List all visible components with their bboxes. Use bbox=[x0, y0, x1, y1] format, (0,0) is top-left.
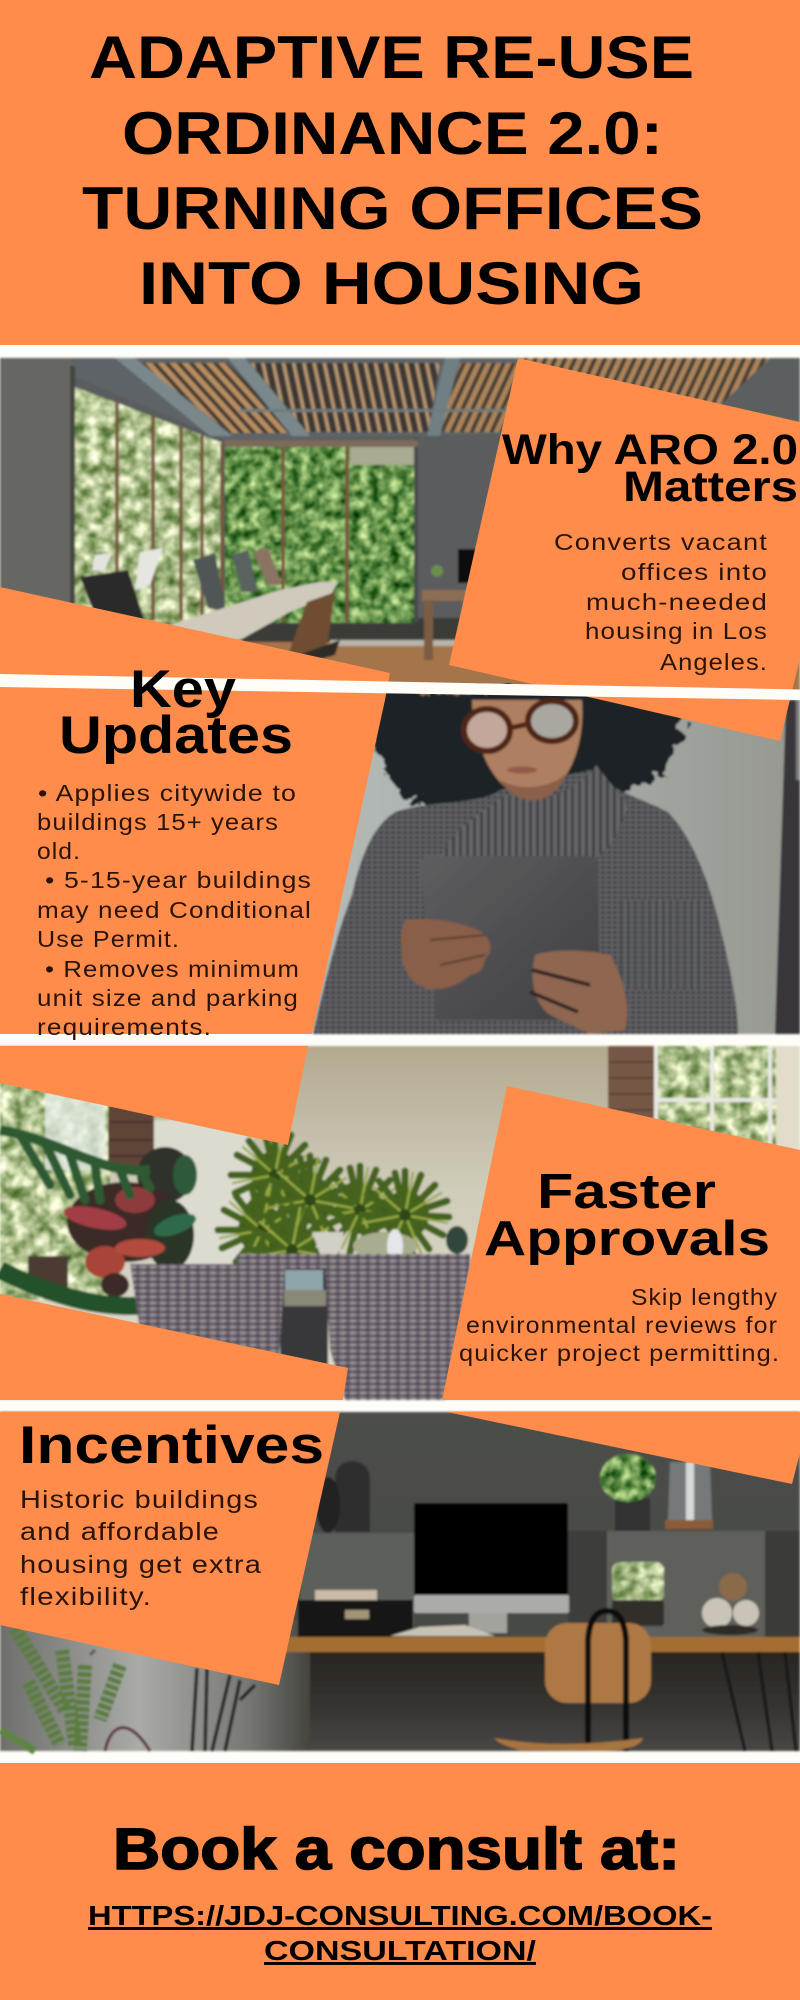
dracaena plants bbox=[218, 1131, 449, 1292]
panel: title banner bbox=[0, 0, 800, 345]
pine branches bbox=[0, 1130, 150, 1170]
decorative balls bbox=[719, 1573, 747, 1601]
heading: Key Updates: Updates bbox=[59, 706, 293, 765]
text: incentives body bbox=[20, 1486, 262, 1611]
panel: footer banner bbox=[0, 1763, 800, 2000]
croton plant bbox=[62, 1147, 199, 1297]
pot bbox=[312, 1232, 344, 1254]
hair bbox=[371, 690, 683, 807]
heading: Why ARO 2.0 Matters: Matters bbox=[623, 463, 798, 511]
heading: Key Updates: Key bbox=[130, 660, 237, 719]
shape: Incentives panel bbox=[0, 1412, 340, 1685]
text: key updates list: may need Conditional bbox=[37, 897, 312, 923]
text: faster approvals body: quicker project permitting. bbox=[459, 1340, 780, 1366]
text: key updates list: • Applies citywide to bbox=[38, 780, 297, 806]
link: consultation URL: CONSULTATION/ bbox=[264, 1935, 536, 1966]
text: key updates list: buildings 15+ years bbox=[37, 809, 279, 835]
text: key updates list: Use Permit. bbox=[37, 926, 180, 952]
text: faster approvals body: environmental reviews for bbox=[466, 1312, 778, 1338]
wicker chairs bbox=[130, 1264, 285, 1372]
heading: Why ARO 2.0 Matters bbox=[502, 426, 798, 511]
cushion and table bbox=[280, 1268, 328, 1388]
hairpin legs bbox=[722, 1652, 796, 1751]
shelf boxes bbox=[300, 1533, 414, 1637]
heading: Incentives: Incentives bbox=[19, 1416, 324, 1475]
text: key updates list: requirements. bbox=[37, 1014, 212, 1040]
text: key updates list: • 5-15-year buildings bbox=[45, 867, 312, 893]
link: consultation URL: HTTPS://JDJ-CONSULTING.COM/BOOK- bbox=[88, 1900, 712, 1931]
call to action heading: Book a consult at: bbox=[113, 1817, 680, 1882]
right hand bbox=[533, 950, 627, 1034]
text: why ARO body bbox=[554, 529, 768, 675]
text: faster approvals body bbox=[459, 1284, 780, 1366]
text: key updates list: old. bbox=[37, 838, 81, 864]
desk bbox=[280, 1637, 800, 1652]
text: faster approvals body: Skip lengthy bbox=[631, 1284, 778, 1310]
photo: patio with plants and wicker chairs bbox=[0, 1046, 800, 1400]
light wall bottom-left bbox=[0, 1620, 310, 1751]
photo: woman with tablet bbox=[312, 690, 800, 1034]
title: INTO HOUSING bbox=[139, 250, 644, 317]
heading: Why ARO 2.0 Matters: Why ARO 2.0 bbox=[502, 426, 798, 474]
back chairs bbox=[237, 1254, 470, 1268]
heading: Faster Approvals: Faster bbox=[537, 1165, 716, 1219]
tablet bbox=[420, 856, 600, 1020]
text: incentives body: flexibility. bbox=[20, 1583, 152, 1611]
photo: office with forest windows bbox=[0, 358, 800, 700]
text: incentives body: Historic buildings bbox=[20, 1486, 259, 1514]
chair bbox=[494, 1611, 651, 1751]
flowers bbox=[353, 1232, 417, 1260]
text: incentives body: and affordable bbox=[20, 1518, 220, 1546]
shape: Faster Approvals top-left bbox=[0, 1046, 308, 1145]
photo: dark desk with monitor bbox=[0, 1412, 800, 1751]
left hand bbox=[401, 919, 491, 989]
text: incentives body: housing get extra bbox=[20, 1551, 262, 1579]
turtleneck bbox=[440, 765, 628, 860]
monitor bbox=[414, 1503, 568, 1595]
title: TURNING OFFICES bbox=[82, 175, 703, 242]
glasses bbox=[464, 701, 576, 751]
text: why ARO body: Converts vacant bbox=[554, 529, 768, 555]
band: white divider bbox=[0, 674, 800, 700]
shape: Faster Approvals panel bbox=[442, 1086, 800, 1400]
calathea plant and rods bbox=[0, 1628, 255, 1751]
shape: Faster Approvals bottom-left bbox=[0, 1294, 348, 1400]
heading: Key Updates bbox=[59, 660, 293, 765]
sweater body bbox=[313, 770, 738, 1034]
text: why ARO body: offices into bbox=[621, 559, 768, 585]
text: key updates list: unit size and parking bbox=[37, 985, 299, 1011]
face bbox=[472, 700, 582, 798]
terrarium bbox=[612, 1562, 664, 1602]
title: ORDINANCE 2.0: bbox=[122, 100, 663, 167]
title: ADAPTIVE RE-USE bbox=[89, 24, 694, 91]
shape: Key Updates panel bbox=[0, 587, 390, 1034]
text: key updates list: • Removes minimum bbox=[45, 956, 300, 982]
vases bbox=[335, 1461, 370, 1532]
text: key updates list bbox=[37, 780, 312, 1040]
heading: Faster Approvals bbox=[484, 1165, 770, 1266]
text: why ARO body: Angeles. bbox=[660, 649, 768, 675]
open book bbox=[390, 1625, 495, 1636]
title bbox=[82, 24, 703, 317]
shape: Why ARO panel bbox=[449, 358, 800, 741]
text: why ARO body: housing in Los bbox=[585, 618, 768, 644]
shape: top-right corner band bbox=[447, 1412, 800, 1484]
heading: Faster Approvals: Approvals bbox=[484, 1212, 770, 1266]
box and books bbox=[298, 1600, 413, 1637]
sleeve ribbing bbox=[620, 900, 705, 990]
link: consultation URL bbox=[88, 1900, 712, 1966]
text: why ARO body: much-needed bbox=[586, 589, 768, 615]
